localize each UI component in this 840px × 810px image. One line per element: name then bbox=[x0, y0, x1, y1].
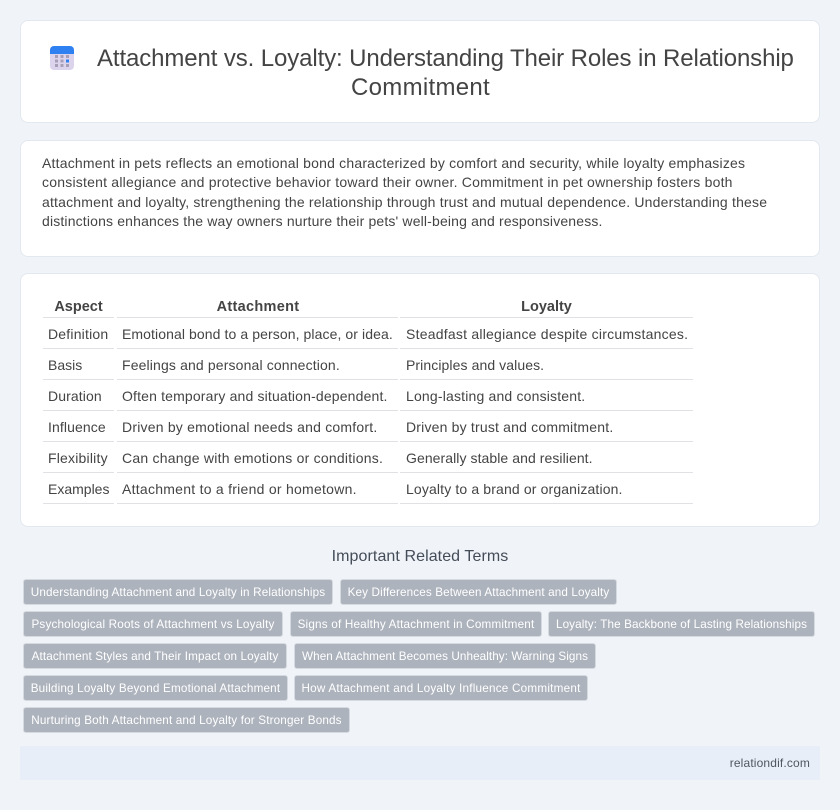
heading: related terms: Important Related Terms bbox=[332, 548, 508, 565]
table rows: Loyalty to a brand or organization. bbox=[406, 481, 623, 497]
summary text: consistent allegiance and protective behavior toward their owner. Commitment in pet ownership fosters both bbox=[42, 174, 733, 190]
table rows: Influence bbox=[48, 419, 106, 435]
related term tags: Key Differences Between Attachment and Loyalty bbox=[348, 586, 609, 599]
table rows: Attachment to a friend or hometown. bbox=[122, 481, 357, 497]
related term tags: Nurturing Both Attachment and Loyalty for Stronger Bonds bbox=[31, 714, 342, 727]
table rows: Feelings and personal connection. bbox=[122, 357, 340, 373]
panel: title card bbox=[20, 20, 820, 123]
related term tags: Signs of Healthy Attachment in Commitment bbox=[298, 618, 534, 631]
summary text: Attachment in pets reflects an emotional bond characterized by comfort and security, while loyalty emphasizes bbox=[42, 155, 745, 171]
title: Attachment vs. Loyalty: Understanding Their Roles in Relationship bbox=[97, 45, 794, 72]
table rows: Flexibility bbox=[48, 450, 108, 466]
related term tags: Psychological Roots of Attachment vs Loyalty bbox=[31, 618, 275, 631]
footer source: relationdif.com bbox=[730, 756, 810, 770]
table rows: Principles and values. bbox=[406, 357, 544, 373]
table rows: Often temporary and situation-dependent. bbox=[122, 388, 388, 404]
table rows: Basis bbox=[48, 357, 82, 373]
table rows bbox=[43, 317, 693, 504]
table rows: Definition bbox=[48, 326, 108, 342]
panel: comparison table bbox=[20, 273, 820, 527]
table rows: Long-lasting and consistent. bbox=[406, 388, 585, 404]
related term tags: Building Loyalty Beyond Emotional Attachment bbox=[31, 682, 280, 695]
summary text bbox=[42, 155, 767, 229]
table header: Aspect bbox=[54, 299, 103, 315]
related term tags: Attachment Styles and Their Impact on Loyalty bbox=[32, 650, 278, 663]
related term tags: When Attachment Becomes Unhealthy: Warning Signs bbox=[302, 650, 588, 663]
table header: Loyalty bbox=[521, 299, 572, 315]
related term tags: How Attachment and Loyalty Influence Commitment bbox=[301, 682, 581, 695]
table header bbox=[54, 299, 572, 315]
footer bar bbox=[20, 746, 820, 780]
summary text: attachment and loyalty, strengthening the relationship through trust and mutual dependence. Understanding these bbox=[42, 194, 767, 210]
panel: summary bbox=[20, 140, 820, 257]
table rows: Can change with emotions or conditions. bbox=[122, 450, 383, 466]
title bbox=[97, 45, 794, 101]
related term tags bbox=[23, 579, 815, 733]
icon: calendar bbox=[50, 46, 74, 70]
table rows: Duration bbox=[48, 388, 102, 404]
table rows: Driven by emotional needs and comfort. bbox=[122, 419, 377, 435]
table rows: Generally stable and resilient. bbox=[406, 450, 593, 466]
table rows: Driven by trust and commitment. bbox=[406, 419, 613, 435]
title: Commitment bbox=[351, 74, 490, 101]
related term tags: Loyalty: The Backbone of Lasting Relationships bbox=[556, 618, 807, 631]
table rows: Steadfast allegiance despite circumstances. bbox=[406, 326, 688, 342]
table header: Attachment bbox=[217, 299, 299, 315]
table rows: Examples bbox=[48, 481, 109, 497]
related term tags: Understanding Attachment and Loyalty in Relationships bbox=[31, 586, 325, 599]
table rows: Emotional bond to a person, place, or idea. bbox=[122, 326, 393, 342]
summary text: distinctions enhances the way owners nurture their pets' well-being and responsiveness. bbox=[42, 213, 603, 229]
